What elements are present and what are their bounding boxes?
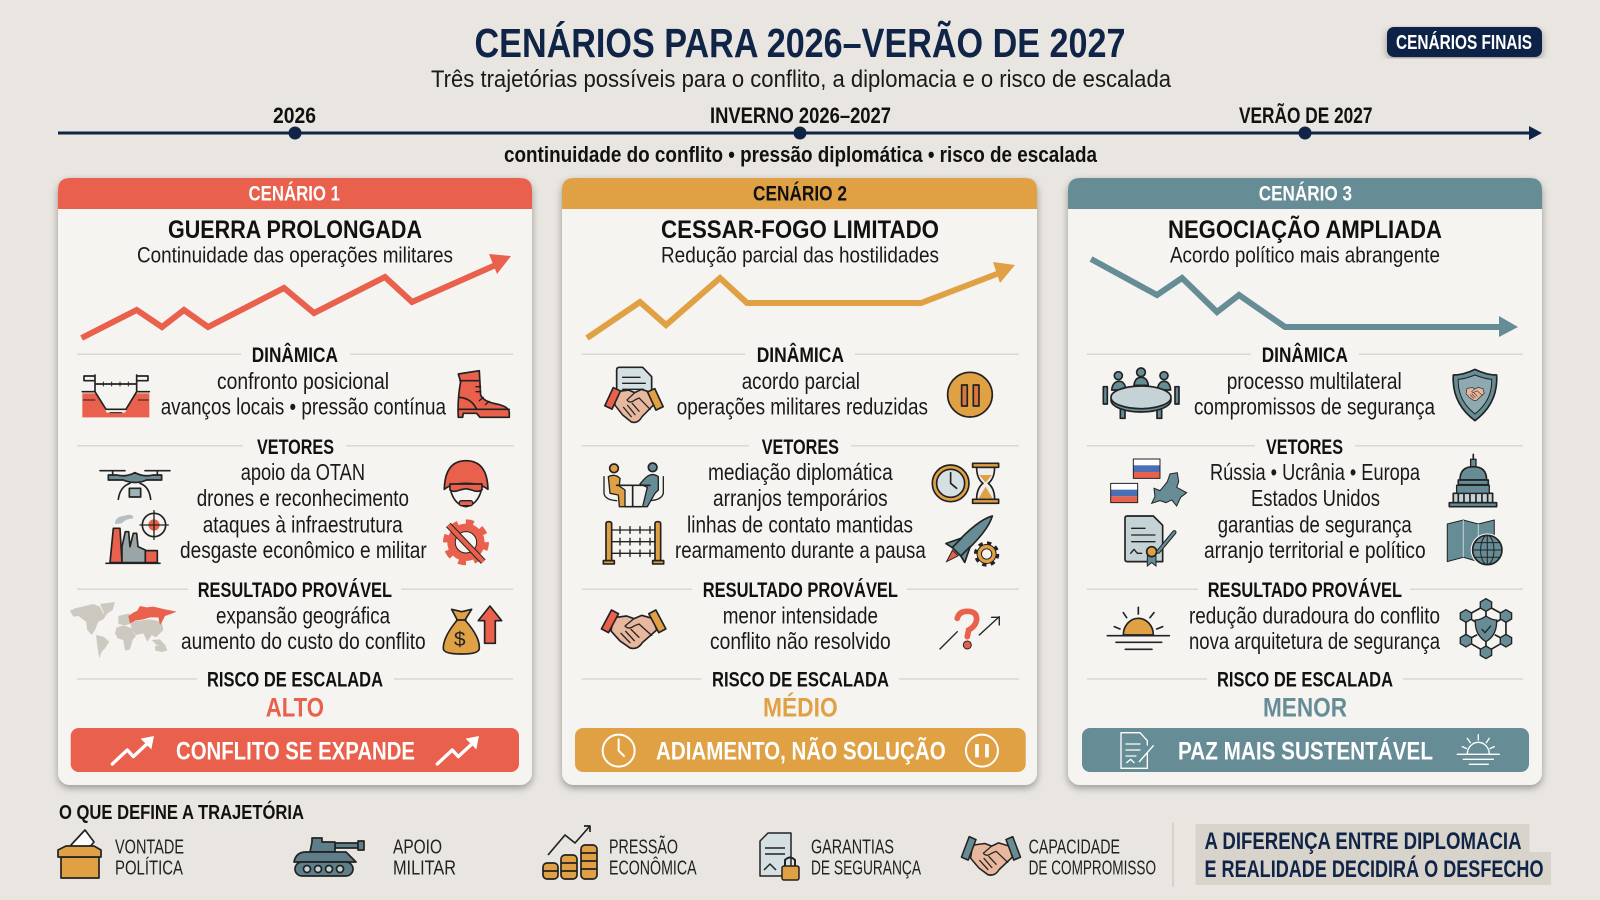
resultado provável: aumento do custo do conflito [181,628,426,654]
vetores: apoio da OTAN [241,459,365,485]
factor: garantias de segurança [760,833,921,880]
risco de escalada: menor: RISCO DE ESCALADA [1217,669,1393,692]
factor: pressão econômica: ECONÔMICA [609,857,697,880]
risco de escalada: médio [582,669,1019,723]
icon: clock and hourglass [932,463,999,503]
risco de escalada: menor: MENOR [1263,693,1347,723]
factor: vontade política [58,830,184,880]
resultado provável: RESULTADO PROVÁVEL [1208,579,1402,602]
factor: apoio militar [294,836,456,880]
header: cenário 1 [58,178,532,209]
factor: garantias de segurança: DE SEGURANÇA [811,858,921,880]
header: cenário 2: CENÁRIO 2 [753,183,847,206]
vetores: VETORES [1266,436,1343,459]
resultado provável: RESULTADO PROVÁVEL [198,579,392,602]
icon: coins and chart [543,826,597,879]
resultado provável: redução duradoura do conflito [1189,602,1440,628]
panel: cenário 3 [1068,178,1542,785]
resultado provável: expansão geográfica [216,602,390,628]
icon: ballot box [58,830,101,878]
risco de escalada: médio: MÉDIO [763,692,838,723]
icon: security network [1460,599,1512,659]
vetores: VETORES [257,436,334,459]
factor: pressão econômica [543,826,697,880]
factor: apoio militar: APOIO [393,836,442,858]
icon: capitol [1449,454,1497,507]
icon: flags and europe [1111,459,1187,506]
dinâmica: acordo parcial [742,368,860,394]
icon: tank [294,838,364,876]
factor: capacidade de compromisso: DE COMPROMISSO [1029,858,1156,880]
resultado provável [582,579,1019,654]
vetores [582,436,1019,563]
panel: cenário 2 [562,178,1037,785]
icon: boot [458,371,509,417]
icon: round table [1103,368,1179,418]
banner: conflito se expande: CONFLITO SE EXPANDE [176,737,415,765]
icon: signed document [1125,516,1174,566]
icon: trench [82,375,149,417]
badge: cenários finais: CENÁRIOS FINAIS [1396,31,1532,54]
vetores: garantias de segurança [1218,512,1412,538]
icon: broken gear [446,522,486,562]
icon: pause [948,372,992,417]
banner: paz mais sustentável: PAZ MAIS SUSTENTÁVEL [1178,736,1433,765]
factor: capacidade de compromisso [961,836,1156,880]
factor: garantias de segurança: GARANTIAS [811,836,894,858]
vetores: rearmamento durante a pausa [675,537,926,563]
callout: conclusion [1196,824,1551,885]
banner: conflito se expande [71,728,519,772]
icon: money bag and arrow [443,606,502,654]
resultado provável: menor intensidade [723,602,878,628]
subheading: Acordo político mais abrangente [1170,242,1440,268]
subheading: Continuidade das operações militares [137,242,453,268]
dinâmica: compromissos de segurança [1194,394,1435,420]
vetores: linhas de contato mantidas [687,512,913,538]
dinâmica: DINÂMICA [1262,343,1348,367]
banner: paz mais sustentável [1082,728,1529,772]
icon: document and lock [760,833,799,880]
subheading: Redução parcial das hostilidades [661,242,939,268]
dinâmica: DINÂMICA [252,343,338,367]
resultado provável: RESULTADO PROVÁVEL [703,579,898,602]
icon: mediation table [604,463,663,507]
timeline [58,103,1542,140]
vetores [1087,436,1523,563]
vetores [77,436,514,563]
icon: factory and target [106,511,168,563]
timeline caption: continuidade do conflito • pressão diplomática • risco de escalada [504,142,1098,167]
title: CENÁRIOS PARA 2026–VERÃO DE 2027 [474,20,1126,66]
panel: cenário 1 [58,178,532,785]
vetores: drones e reconhecimento [197,485,409,511]
vetores: arranjos temporários [713,485,888,511]
dinâmica: DINÂMICA [757,343,844,367]
icon: money bag and arrow: $ [454,628,466,651]
risco de escalada: menor [1087,669,1523,723]
factor: vontade política: VONTADE [115,836,184,858]
header: cenário 2 [562,178,1037,209]
factor: capacidade de compromisso: CAPACIDADE [1029,836,1120,858]
resultado provável: conflito não resolvido [710,628,891,654]
subtitle: Três trajetórias possíveis para o conflito, a diplomacia e o risco de escalada [431,66,1172,93]
icon: question mark and arrows [940,611,999,649]
heading: NEGOCIAÇÃO AMPLIADA [1168,214,1442,244]
line chart: rising [82,254,511,338]
dinâmica: operações militares reduzidas [677,394,928,420]
vetores: ataques à infraestrutura [203,512,403,538]
resultado provável [77,579,513,654]
heading: CESSAR-FOGO LIMITADO [661,216,939,244]
icon: handshake [601,610,666,648]
badge: cenários finais [1387,27,1542,57]
dinâmica [582,343,1019,420]
risco de escalada: alto [77,669,513,723]
header: cenário 1: CENÁRIO 1 [248,183,340,206]
vetores: Estados Unidos [1251,485,1380,511]
banner: adiamento, não solução: ADIAMENTO, NÃO SOLUÇÃO [656,735,946,765]
vetores: mediação diplomática [708,459,893,485]
timeline: VERÃO DE 2027 [1239,103,1372,128]
dinâmica [1087,343,1523,420]
icon: world map [70,602,177,658]
icon: shield handshake [1453,369,1497,421]
vetores: desgaste econômico e militar [180,537,427,563]
icon: document and handshake [605,367,663,422]
resultado provável [1087,579,1523,654]
icon: fence [603,522,664,564]
dinâmica: confronto posicional [217,368,389,394]
dinâmica [77,343,513,420]
timeline: INVERNO 2026–2027 [710,103,891,128]
header: cenário 3 [1068,178,1542,209]
factor: vontade política: POLÍTICA [115,857,183,880]
vetores: VETORES [762,436,839,459]
vetores: arranjo territorial e político [1204,537,1426,563]
dinâmica: avanços locais • pressão contínua [161,394,446,420]
icon: map and globe [1447,520,1504,567]
resultado provável: nova arquitetura de segurança [1189,628,1440,654]
timeline: 2026 [273,103,316,128]
dinâmica: processo multilateral [1227,368,1402,394]
header: cenário 3: CENÁRIO 3 [1259,183,1352,206]
risco de escalada: médio: RISCO DE ESCALADA [712,669,889,692]
footer heading: O QUE DEFINE A TRAJETÓRIA [59,800,304,824]
vetores: Rússia • Ucrânia • Europa [1210,459,1420,485]
risco de escalada: alto: RISCO DE ESCALADA [207,669,383,692]
factor: pressão econômica: PRESSÃO [609,834,678,858]
icon: drone [100,471,170,499]
banner: adiamento, não solução [575,728,1026,772]
factor: apoio militar: MILITAR [393,858,456,880]
line chart: rise then plateau [587,262,1015,338]
heading: GUERRA PROLONGADA [168,216,422,244]
icon: handshake [961,837,1021,875]
line chart: falling [1091,259,1518,337]
icon: sunrise [1107,607,1169,649]
icon: rocket and gear [937,507,1002,571]
risco de escalada: alto: ALTO [266,693,324,723]
icon: helmet [444,461,488,507]
